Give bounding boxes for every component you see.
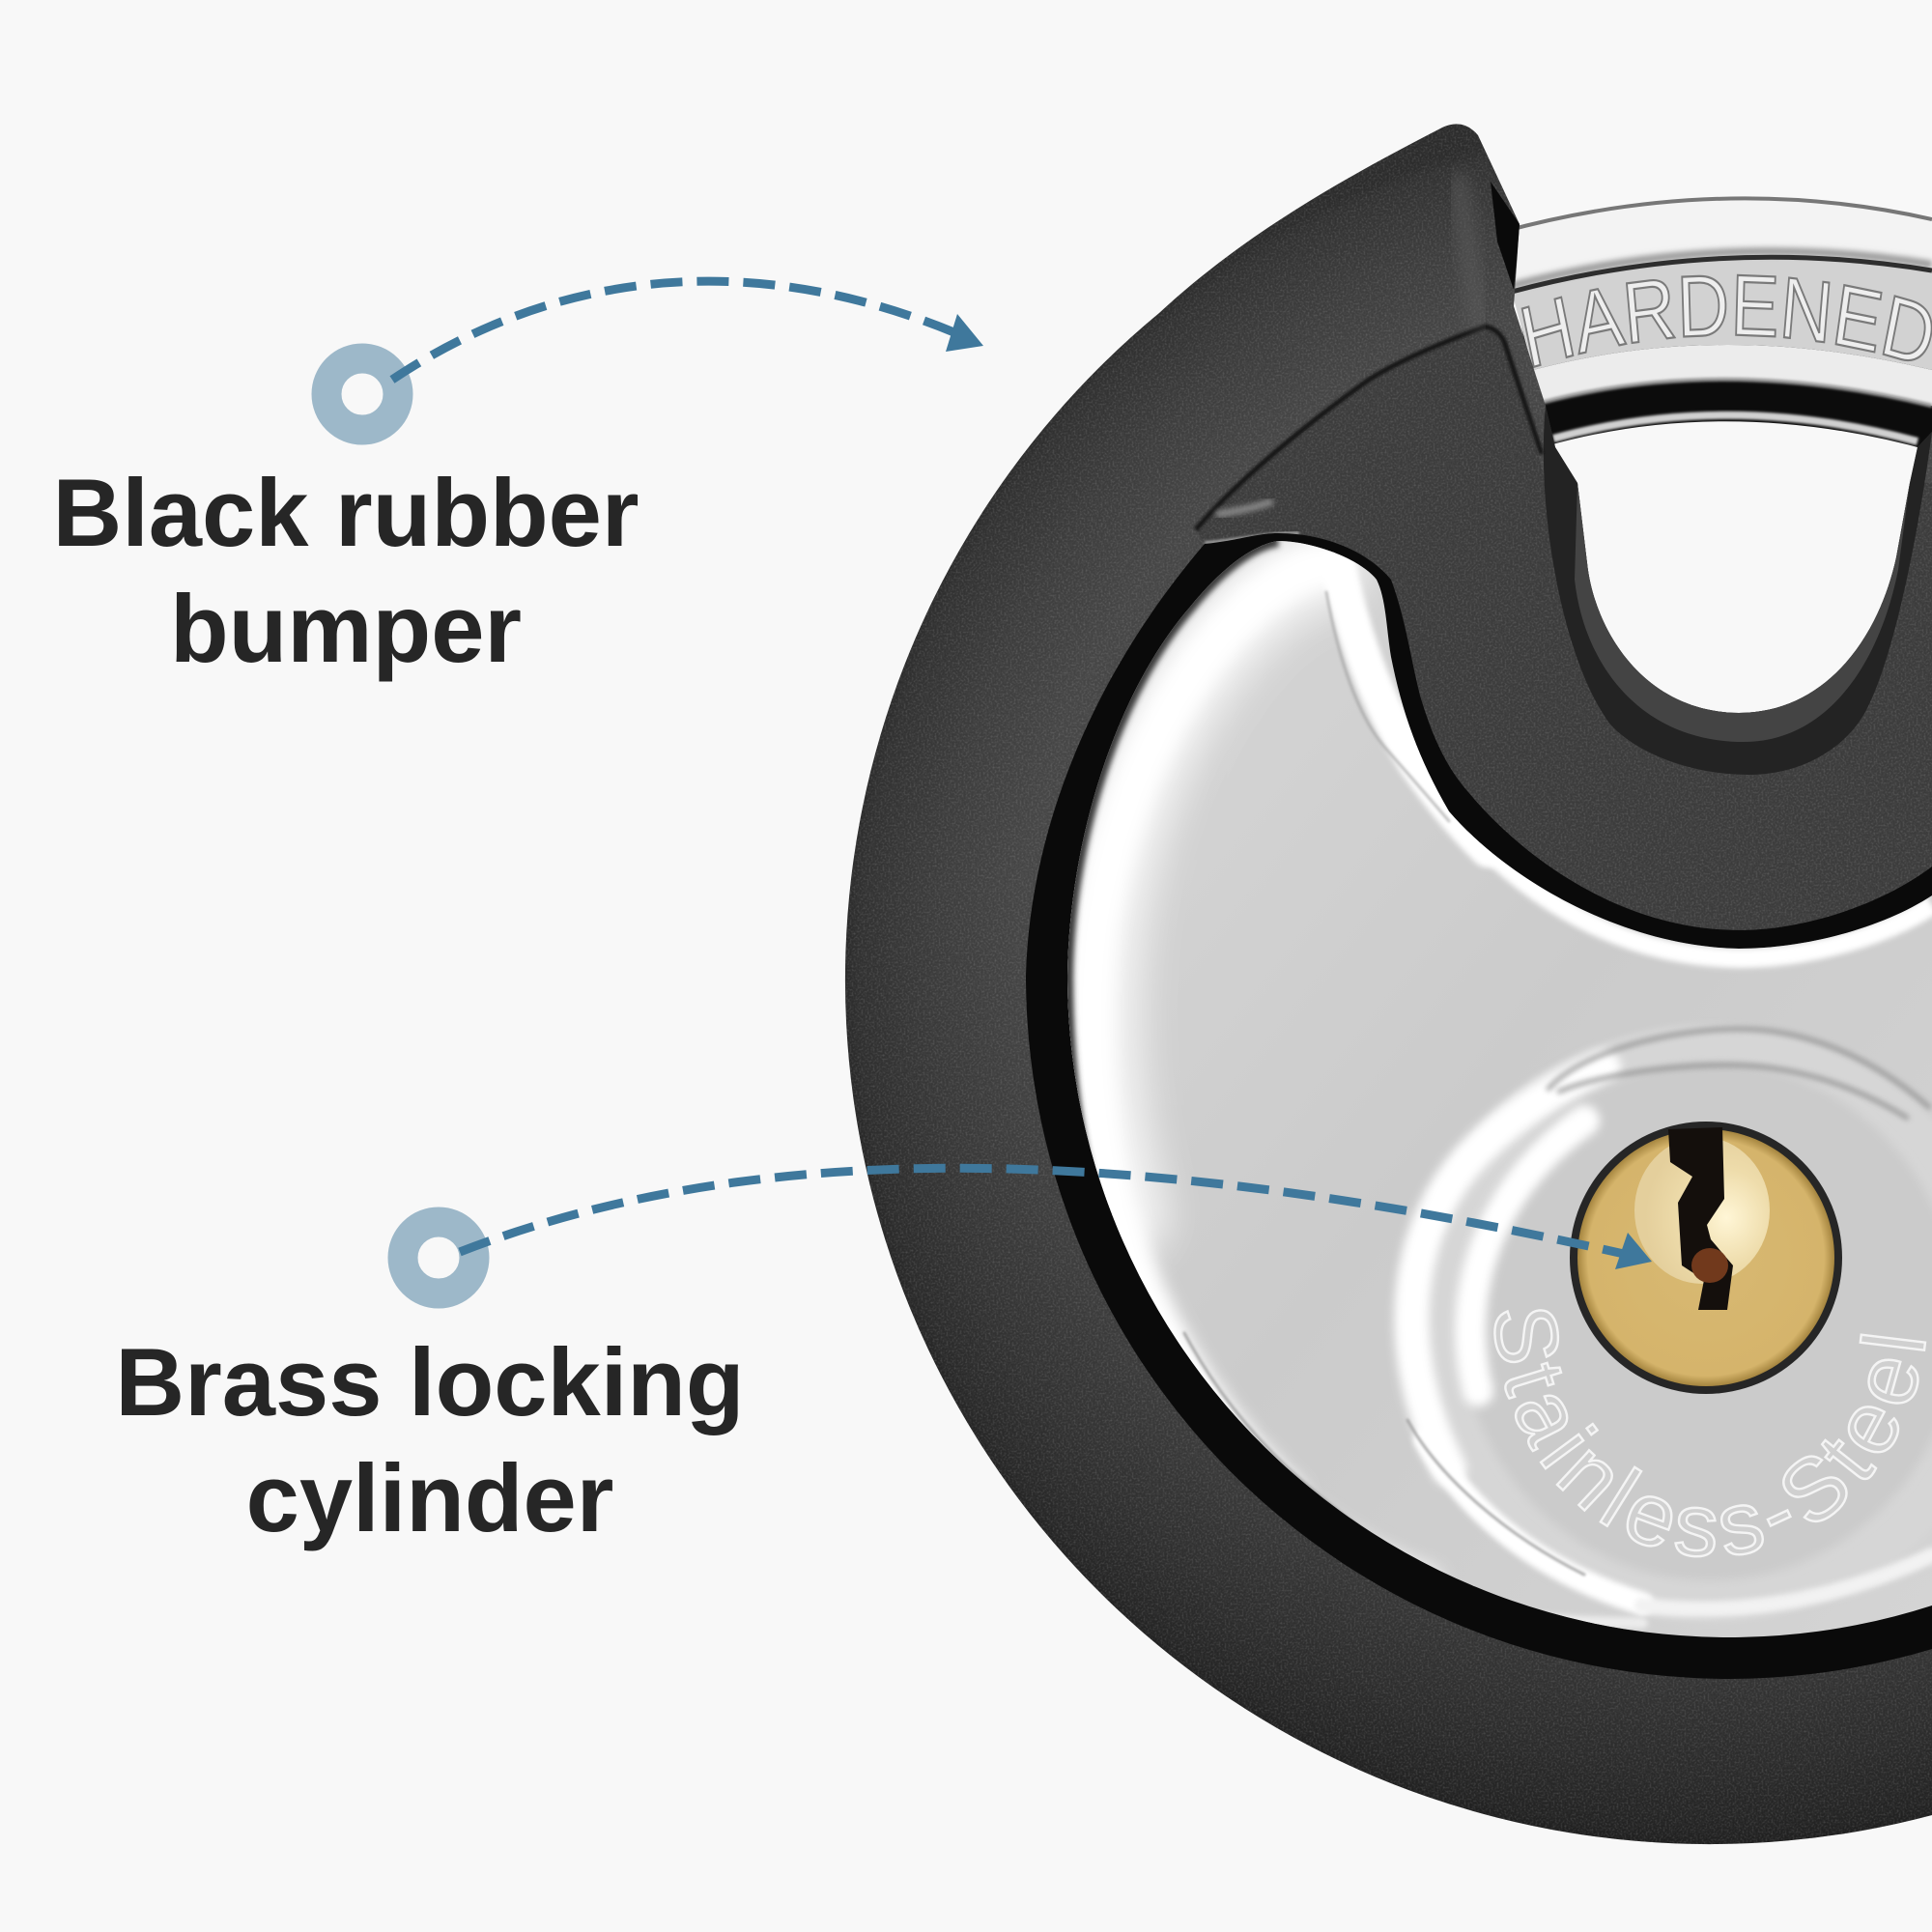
black rubber bumper [845, 124, 1932, 1844]
label text: bumper [170, 576, 522, 683]
marker ring [403, 1222, 474, 1293]
shackle [1515, 196, 1932, 447]
keyway slot [1668, 1127, 1733, 1310]
callout: black rubber bumper [52, 281, 983, 683]
dashed arrow to cylinder [460, 1168, 1652, 1269]
label text: cylinder [246, 1445, 613, 1552]
black inner ring [1026, 533, 1932, 1679]
padlock illustration [844, 124, 1932, 1845]
stainless steel body [1067, 541, 1932, 1637]
engraved shackle text: HARDENED [1520, 274, 1932, 368]
engraved body text: Stainless-Steel [1493, 1309, 1926, 1557]
embossed cylinder collar [1389, 1024, 1932, 1619]
label text: Black rubber [52, 460, 639, 567]
marker ring [327, 358, 398, 430]
callout: brass locking cylinder [115, 1168, 1652, 1552]
label text: Brass locking [115, 1329, 745, 1436]
brass locking cylinder [1570, 1122, 1842, 1394]
dashed arrow to bumper [392, 281, 983, 380]
